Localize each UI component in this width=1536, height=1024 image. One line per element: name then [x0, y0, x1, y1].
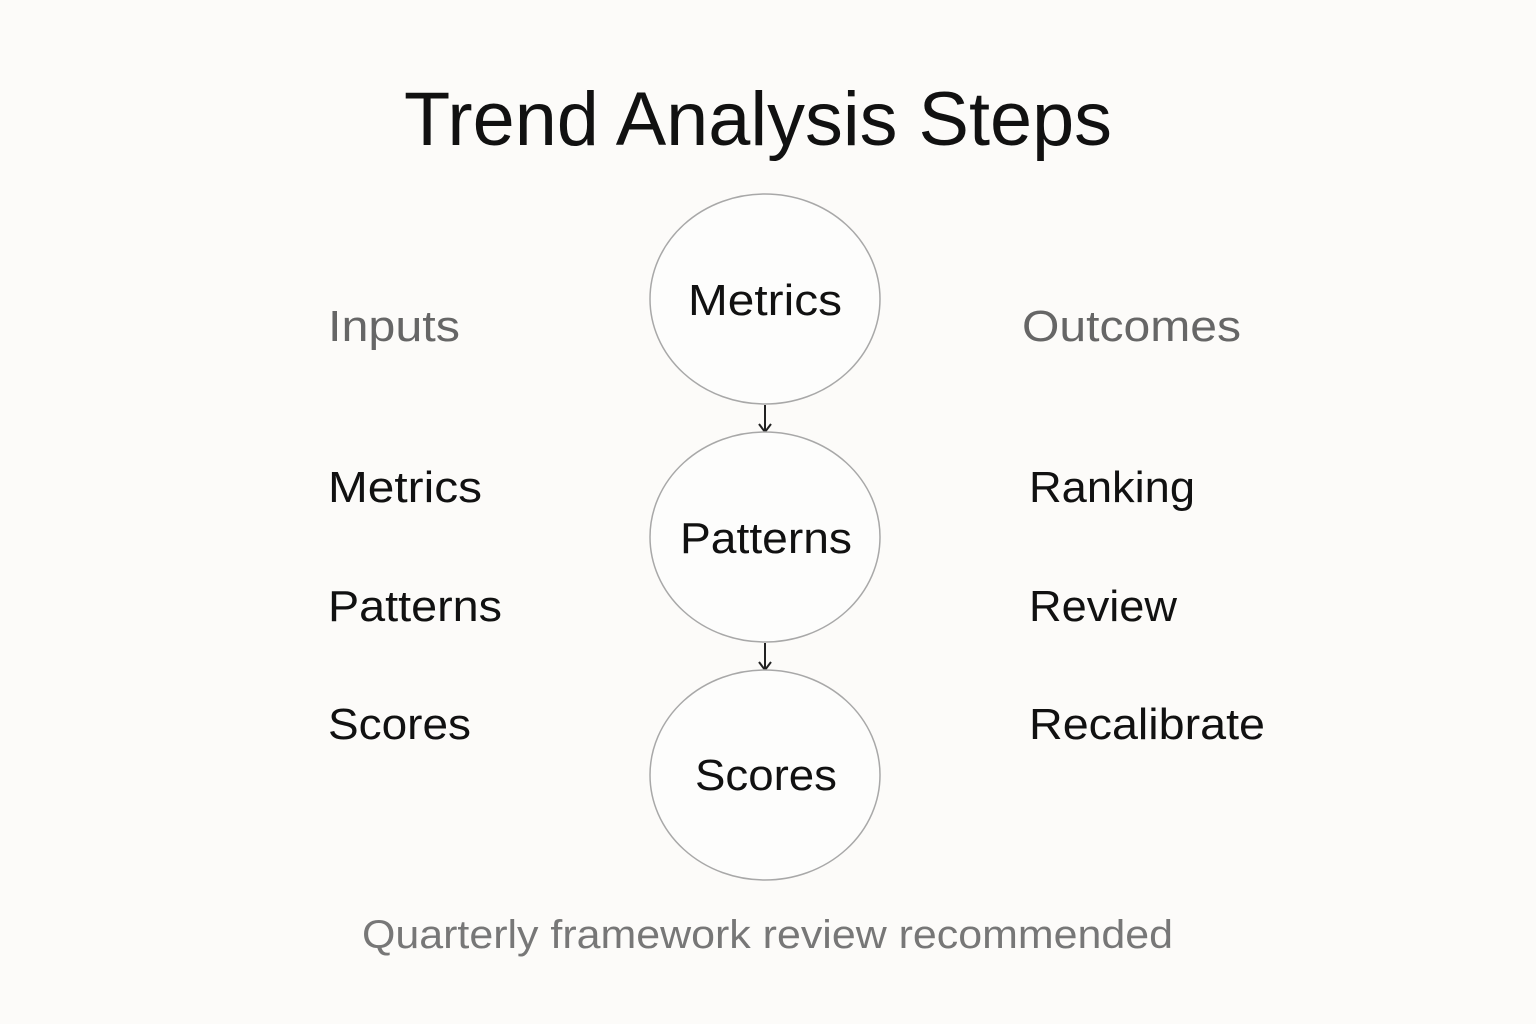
list: outcomes: Ranking — [1029, 463, 1195, 512]
heading: outcomes: Outcomes — [1022, 302, 1241, 351]
arrow: metrics to patterns — [759, 405, 771, 432]
list: outcomes: Recalibrate — [1029, 700, 1265, 749]
heading: inputs: Inputs — [328, 302, 460, 351]
circle: metrics: Metrics — [688, 276, 842, 325]
list: inputs: Metrics — [328, 463, 482, 512]
footer note: Quarterly framework review recommended — [362, 913, 1173, 957]
circle: patterns — [650, 432, 880, 642]
list: outcomes — [1029, 463, 1265, 749]
list: inputs: Patterns — [328, 582, 502, 631]
list: inputs: Scores — [328, 700, 471, 749]
arrow: patterns to scores — [759, 643, 771, 670]
circle: metrics — [650, 194, 880, 404]
circle: patterns: Patterns — [680, 514, 852, 563]
list: outcomes: Review — [1029, 582, 1177, 631]
circle: scores — [650, 670, 880, 880]
circle: scores: Scores — [695, 751, 837, 800]
title: Trend Analysis Steps — [404, 77, 1112, 162]
list: inputs — [328, 463, 502, 749]
